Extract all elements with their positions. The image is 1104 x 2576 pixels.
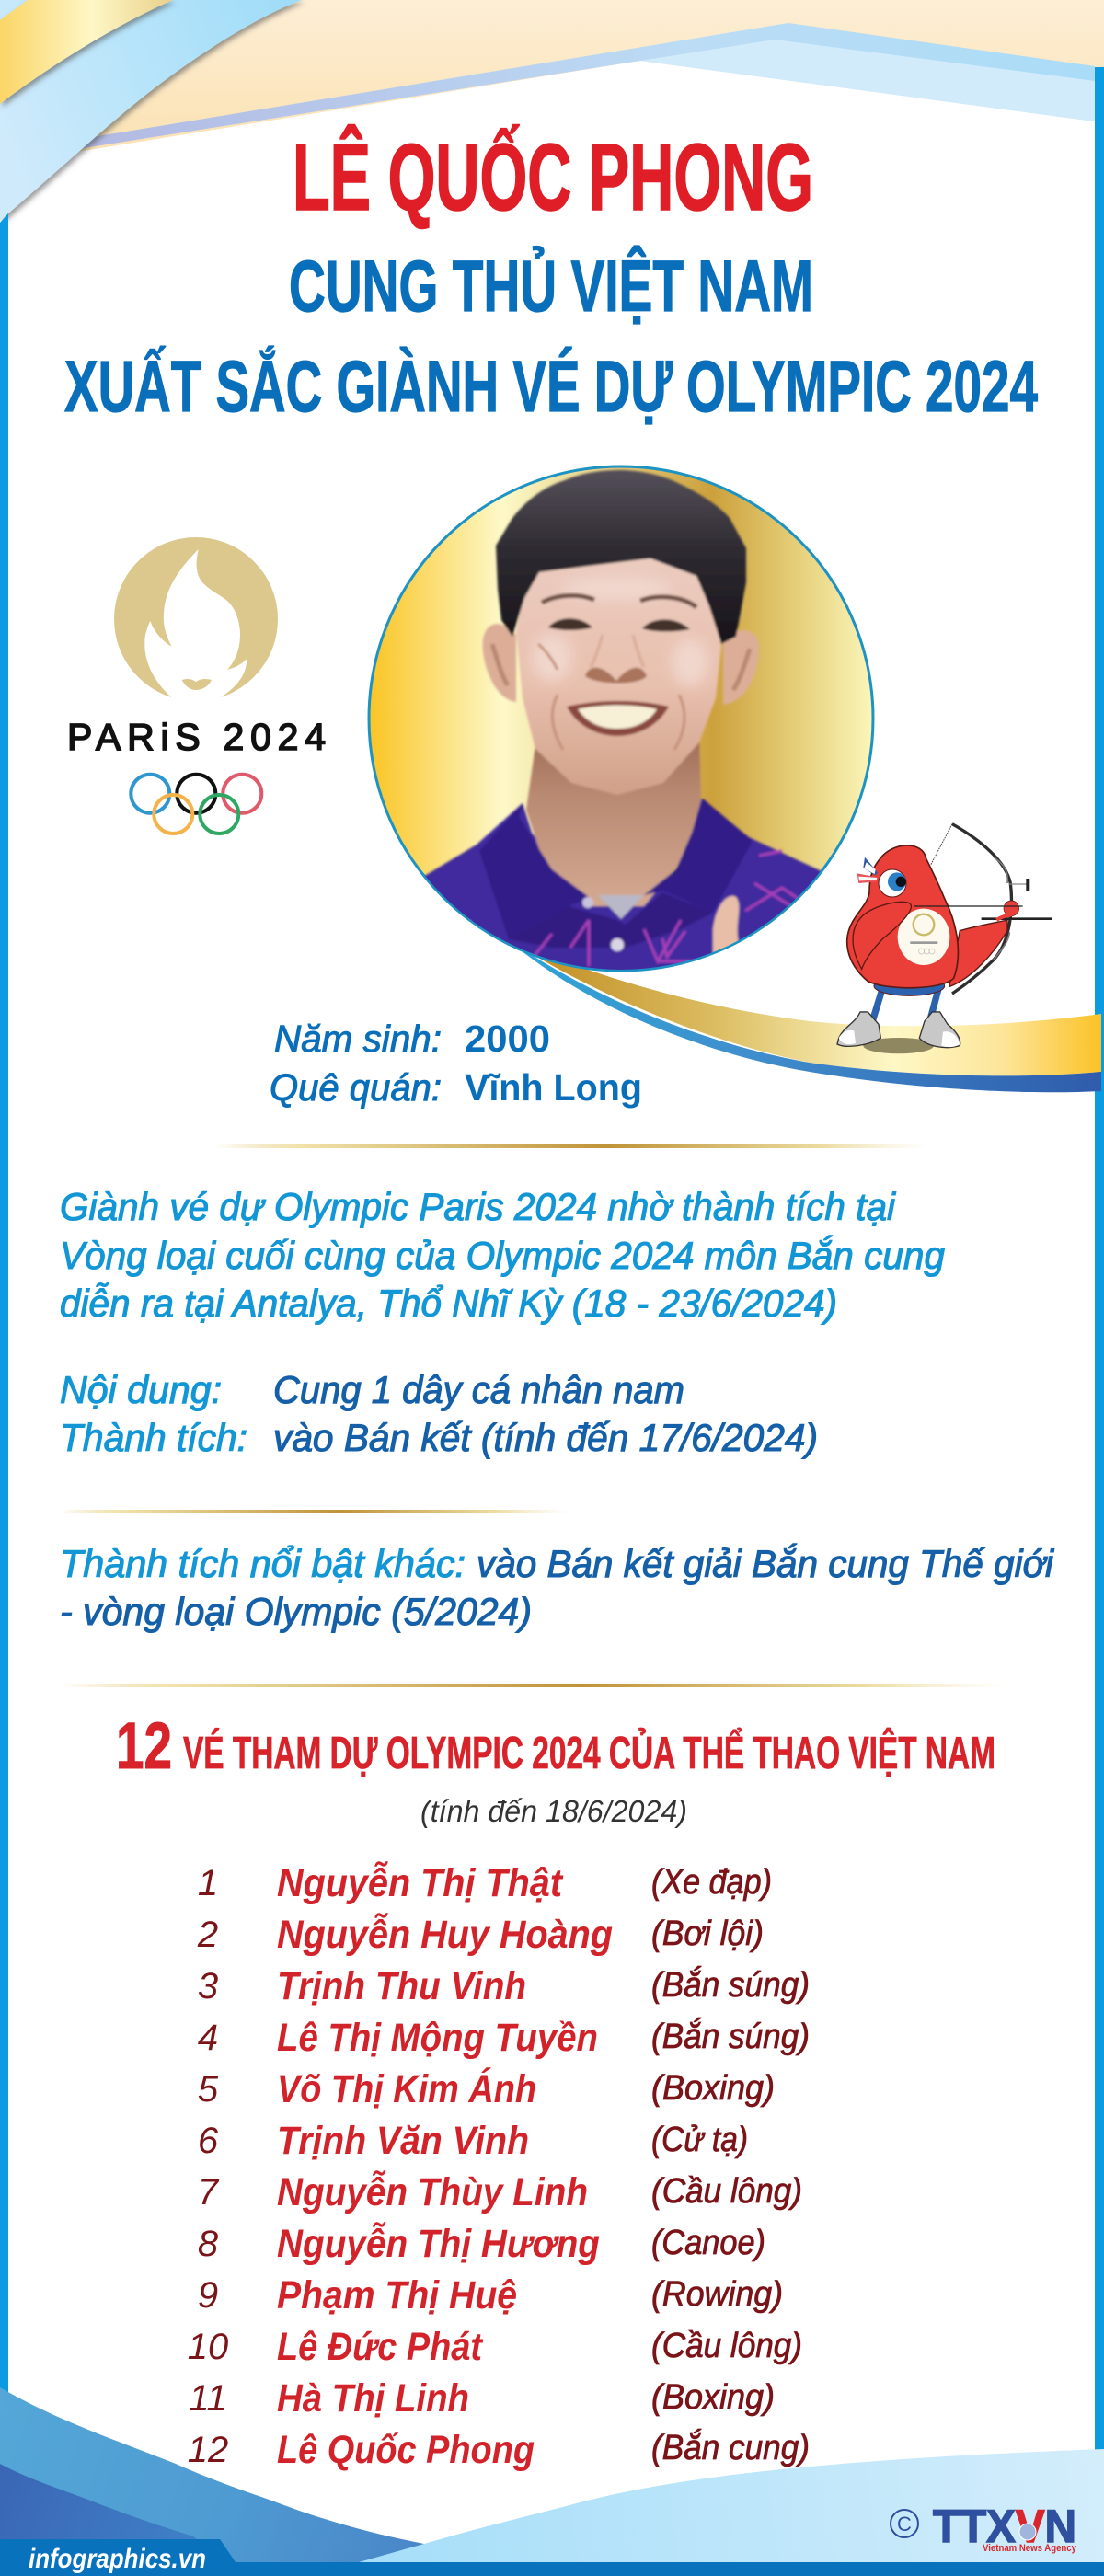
row 5: 5 bbox=[198, 2069, 219, 2110]
shirt pattern bbox=[451, 851, 810, 966]
text: list date note: (tính đến 18/6/2024) bbox=[420, 1794, 687, 1828]
text block: qualification description: diễn ra tại Antalya, Thổ Nhĩ Kỳ (18 - 23/6/2024) bbox=[60, 1282, 837, 1325]
row 8: (Canoe) bbox=[651, 2224, 765, 2262]
footer waves bbox=[0, 2387, 1104, 2576]
row 11: 11 bbox=[189, 2378, 227, 2419]
face bbox=[516, 552, 721, 795]
row 6: (Cử tạ) bbox=[651, 2121, 748, 2159]
row 2: (Bơi lội) bbox=[651, 1915, 764, 1953]
text: birth year row: Năm sinh: bbox=[274, 1018, 442, 1060]
row 7: Nguyễn Thùy Linh bbox=[277, 2169, 588, 2214]
heading: 12 Olympic tickets: 12 bbox=[116, 1710, 172, 1783]
row 12: Lê Quốc Phong bbox=[277, 2428, 535, 2472]
ear shading bbox=[492, 644, 750, 690]
text: birth year row: 2000 bbox=[465, 1018, 550, 1060]
row 10: 10 bbox=[188, 2327, 228, 2367]
text: hometown row: Quê quán: bbox=[270, 1066, 442, 1109]
row 10: Lê Đức Phát bbox=[277, 2325, 483, 2369]
eyes bbox=[548, 618, 592, 630]
row 11: (Boxing) bbox=[651, 2378, 775, 2417]
cheek highlights bbox=[532, 578, 708, 686]
row 9: 9 bbox=[198, 2275, 218, 2316]
heading: 12 Olympic tickets bbox=[116, 1710, 995, 1783]
text: birth year row bbox=[274, 1018, 550, 1060]
row 5: (Boxing) bbox=[651, 2069, 775, 2108]
shirt collar left bbox=[479, 803, 589, 939]
mascot left wing bbox=[853, 902, 911, 969]
row 2: 2 bbox=[197, 1915, 218, 1955]
row 6: 6 bbox=[198, 2121, 219, 2161]
nose bbox=[585, 668, 647, 683]
row 1 bbox=[198, 1860, 772, 1905]
shirt buttons bbox=[582, 897, 593, 908]
text block: event and result: Thành tích: bbox=[60, 1416, 247, 1459]
row 11 bbox=[189, 2376, 775, 2421]
text block: qualification description: Vòng loại cuối cùng của Olympic 2024 môn Bắn cung bbox=[60, 1234, 945, 1277]
row 7: 7 bbox=[198, 2172, 220, 2213]
logo: TTXVN Vietnam News Agency: C bbox=[897, 2513, 912, 2536]
row 6 bbox=[198, 2119, 748, 2163]
heading: subtitle line 1: CUNG THỦ VIỆT NAM bbox=[289, 245, 813, 327]
row 3: (Bắn súng) bbox=[651, 1965, 810, 2005]
mascot shadow bbox=[863, 1038, 934, 1053]
mascot arrow bbox=[914, 906, 1052, 920]
shirt bbox=[424, 798, 822, 970]
row 4: 4 bbox=[198, 2018, 218, 2058]
row 2 bbox=[197, 1912, 764, 1957]
row 1: (Xe đạp) bbox=[651, 1863, 772, 1902]
neck bbox=[526, 736, 701, 906]
mascot bow bbox=[913, 824, 1029, 994]
text block: event and result bbox=[60, 1368, 818, 1459]
text: hometown row bbox=[270, 1066, 642, 1109]
top decorative header shapes bbox=[0, 0, 1104, 221]
row 1: Nguyễn Thị Thật bbox=[277, 1860, 564, 1905]
list: Vietnamese athletes with Olympic tickets bbox=[188, 1860, 810, 2472]
logo: TTXVN Vietnam News Agency: TTXVN bbox=[933, 2501, 1076, 2552]
row 11: Hà Thị Linh bbox=[277, 2376, 469, 2421]
mascot hand bbox=[1004, 901, 1019, 916]
placket shadow bbox=[509, 892, 713, 948]
row 2: Nguyễn Huy Hoàng bbox=[277, 1912, 613, 1957]
thumb bbox=[713, 896, 739, 957]
left ear bbox=[483, 624, 516, 702]
text block: qualification description bbox=[60, 1185, 945, 1325]
row 12: (Bắn cung) bbox=[651, 2428, 810, 2467]
row 3 bbox=[198, 1964, 810, 2008]
text block: other achievements: - vòng loại Olympic (5/2024) bbox=[60, 1590, 532, 1633]
text block: event and result: Nội dung: bbox=[60, 1368, 222, 1411]
eyebrows bbox=[542, 595, 594, 603]
decorative swoosh under portrait bbox=[504, 937, 1101, 1092]
text: hometown row: Vĩnh Long bbox=[465, 1066, 642, 1109]
row 3: 3 bbox=[198, 1966, 218, 2007]
row 4: (Bắn súng) bbox=[651, 2017, 810, 2056]
row 9: Phạm Thị Huệ bbox=[277, 2273, 517, 2317]
title: name: LÊ QUỐC PHONG bbox=[293, 123, 813, 230]
portrait: gold disc with athlete bbox=[369, 466, 873, 994]
row 3: Trịnh Thu Vinh bbox=[277, 1964, 526, 2008]
row 7 bbox=[198, 2169, 802, 2214]
row 6: Trịnh Văn Vinh bbox=[277, 2119, 529, 2163]
row 4: Lê Thị Mộng Tuyền bbox=[277, 2016, 598, 2060]
text block: other achievements: vào Bán kết giải Bắn cung Thế giới bbox=[477, 1542, 1055, 1585]
icon: Paris 2024 logo bbox=[67, 537, 326, 834]
row 9 bbox=[198, 2273, 783, 2317]
undershirt bbox=[598, 895, 644, 919]
text block: qualification description: Giành vé dự Olympic Paris 2024 nhờ thành tích tại bbox=[60, 1185, 897, 1228]
row 5 bbox=[198, 2067, 775, 2111]
text block: event and result: Cung 1 dây cá nhân nam bbox=[273, 1368, 684, 1411]
mascot legs bbox=[872, 980, 941, 1021]
right ear bbox=[723, 630, 759, 705]
mascot eye bbox=[879, 869, 906, 897]
row 10: (Cầu lông) bbox=[651, 2327, 802, 2365]
text block: other achievements bbox=[60, 1542, 1055, 1633]
row 10 bbox=[188, 2325, 802, 2369]
mascot pants bbox=[874, 976, 945, 995]
row 9: (Rowing) bbox=[651, 2275, 783, 2314]
mascot right wing bbox=[949, 920, 1007, 987]
row 4 bbox=[198, 2016, 810, 2060]
row 12 bbox=[188, 2428, 810, 2472]
footer website tab: infographics.vn bbox=[29, 2544, 206, 2574]
hair bbox=[496, 470, 746, 644]
shirt collar right bbox=[644, 799, 753, 913]
mascot body bbox=[847, 845, 958, 988]
text block: other achievements: Thành tích nổi bật khác: bbox=[60, 1542, 466, 1585]
row 7: (Cầu lông) bbox=[651, 2172, 802, 2211]
mouth bbox=[567, 701, 669, 736]
icon: Phryge mascot archer bbox=[837, 824, 1052, 1053]
row 12: 12 bbox=[188, 2430, 228, 2470]
row 8: Nguyễn Thị Hương bbox=[277, 2221, 600, 2266]
smile lines bbox=[538, 644, 684, 750]
mascot cockade ribbon bbox=[857, 857, 878, 883]
mascot chest logo bbox=[898, 909, 949, 965]
icon: Paris 2024 logo: PARiS 2024 bbox=[67, 716, 326, 758]
mascot shoes bbox=[837, 1012, 960, 1048]
logo: TTXVN Vietnam News Agency: Vietnam News Agency bbox=[983, 2543, 1077, 2554]
row 1: 1 bbox=[198, 1863, 218, 1903]
row 5: Võ Thị Kim Ánh bbox=[277, 2067, 536, 2111]
row 8 bbox=[198, 2221, 765, 2266]
text block: event and result: vào Bán kết (tính đến 17/6/2024) bbox=[273, 1416, 818, 1459]
row 8: 8 bbox=[198, 2224, 219, 2264]
